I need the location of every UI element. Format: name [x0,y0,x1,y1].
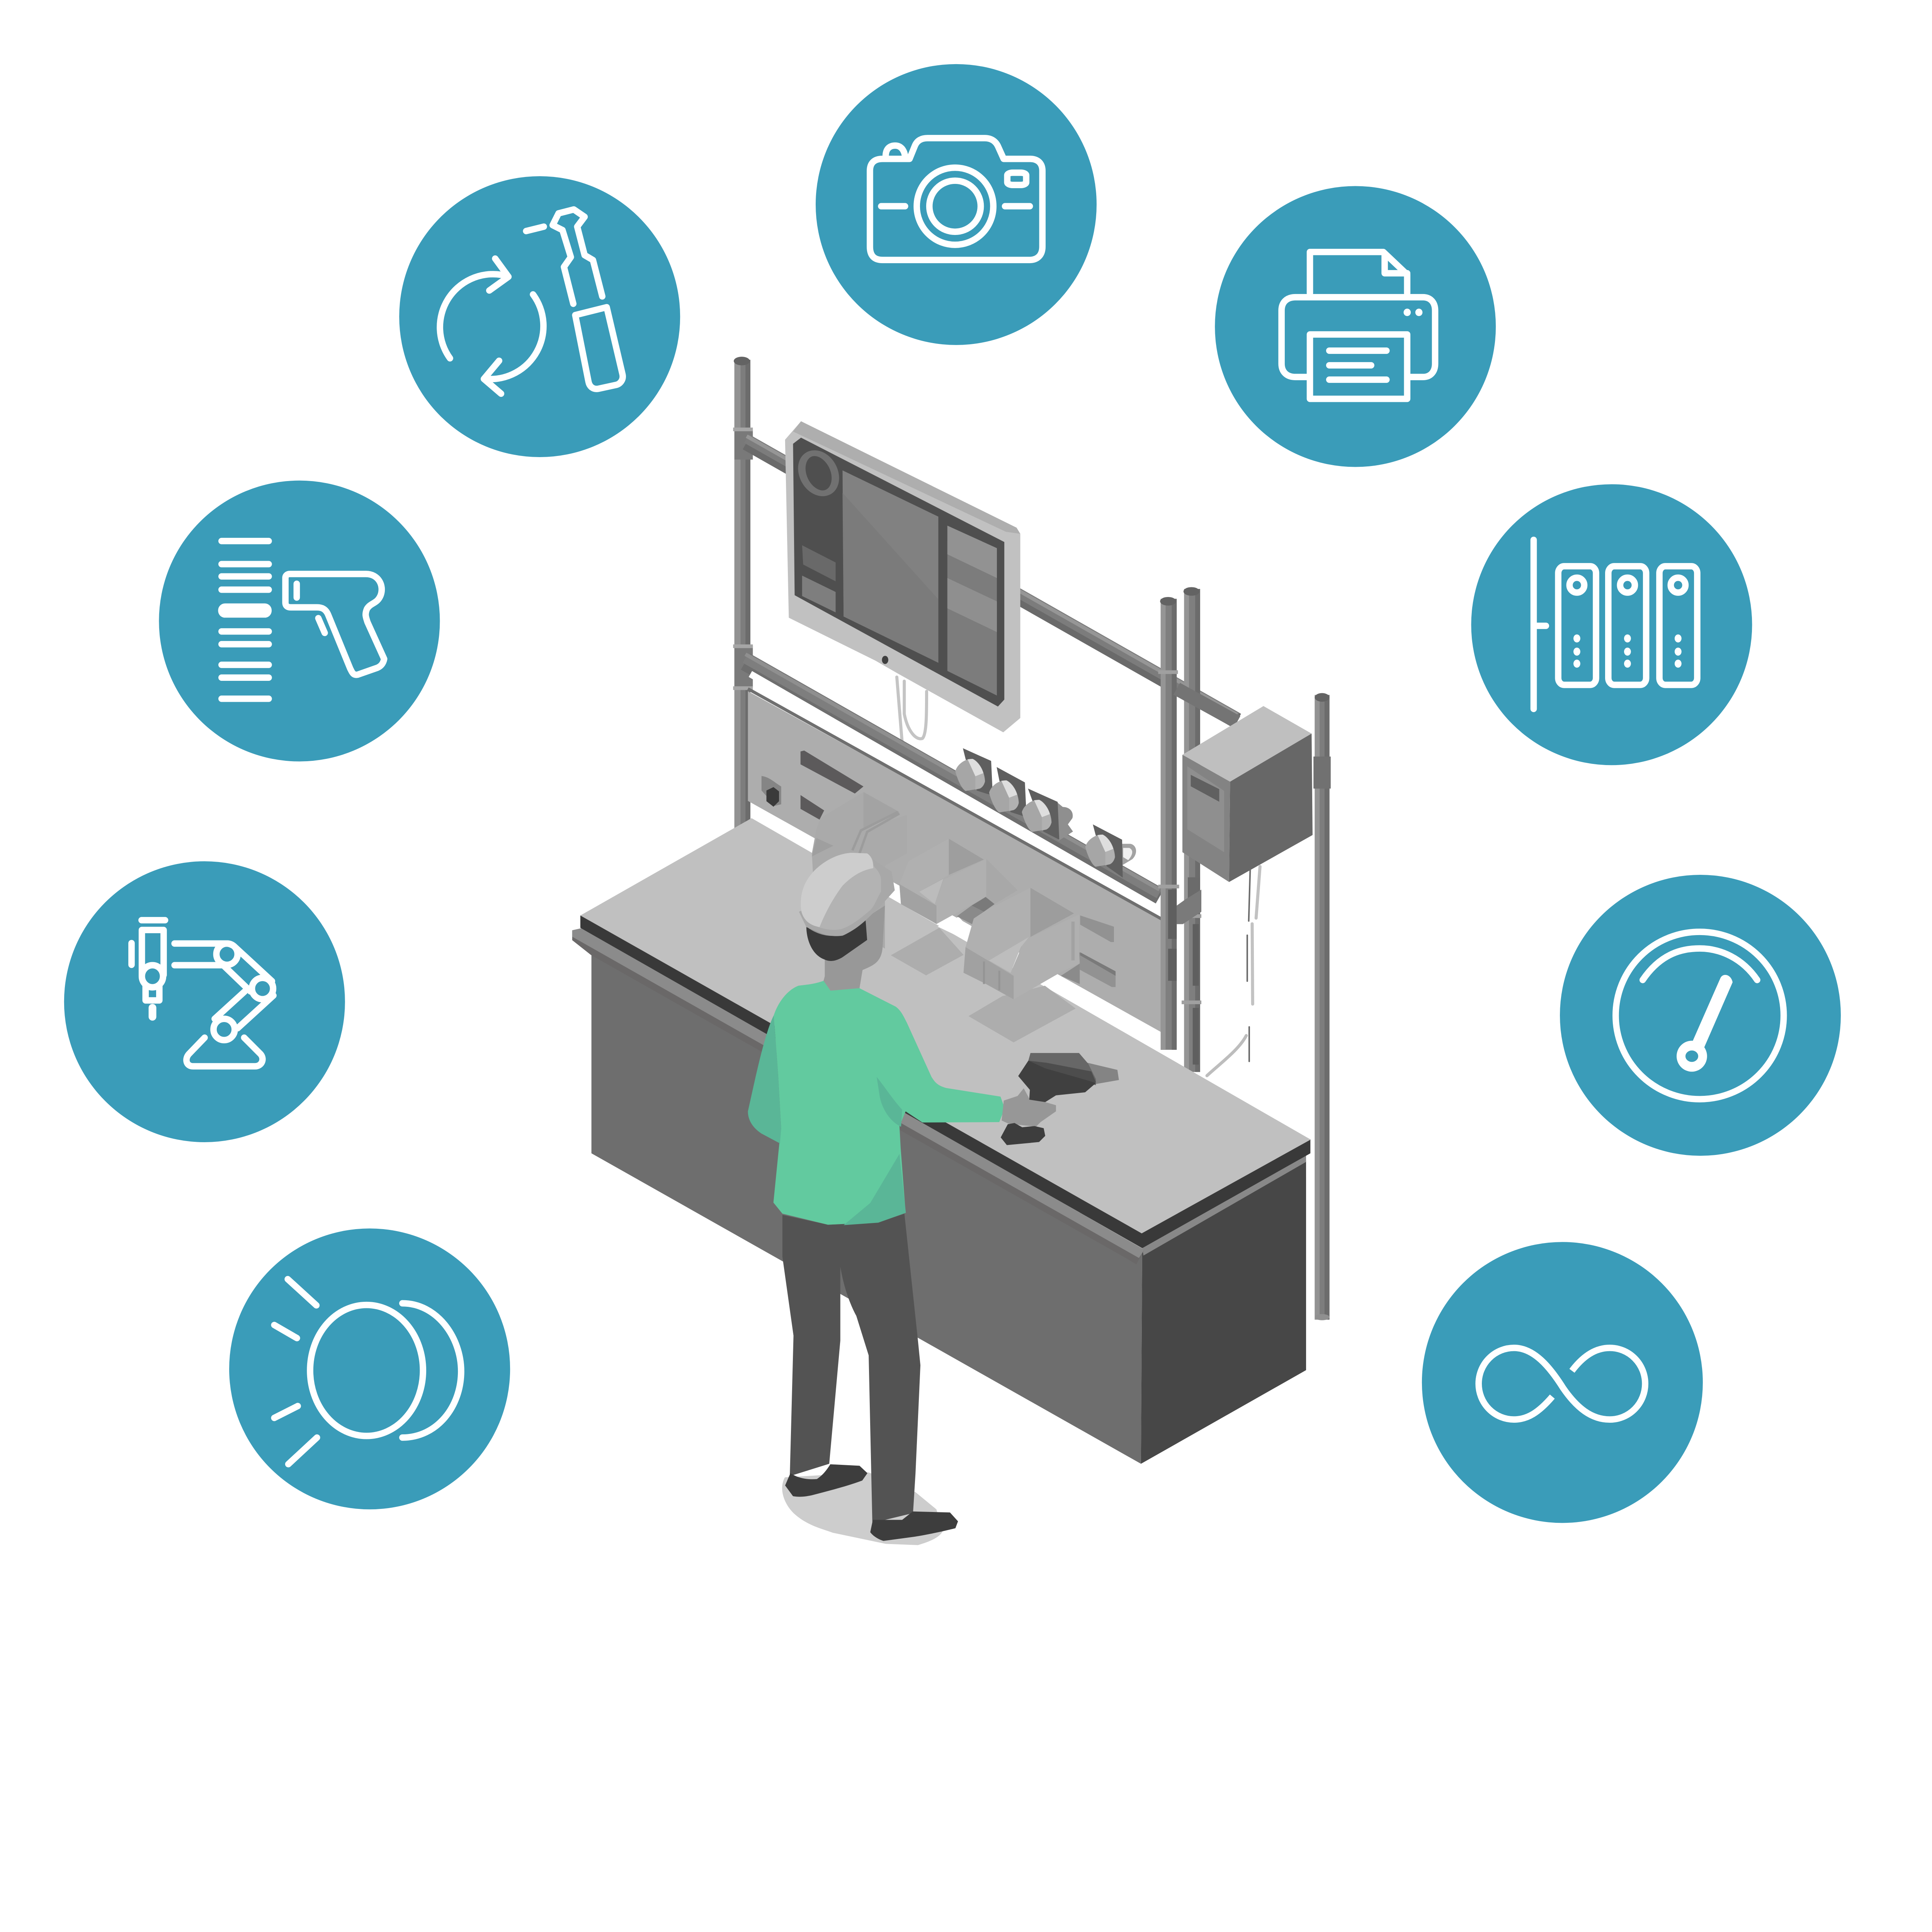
icon: server rack [1471,484,1752,765]
pipe T joint [1177,889,1201,924]
socket cable [777,834,801,854]
socket [767,787,779,807]
box door [1187,766,1224,852]
front upright pole [1158,597,1179,1050]
monitor [785,421,1020,732]
lower cross bar [745,654,1160,897]
floor shadow [782,1473,942,1545]
table top [580,818,1311,1236]
box top [1182,706,1311,782]
left small panels [802,545,836,581]
hair [806,920,867,961]
monitor top edge [793,421,1020,534]
glove dark blob [1001,1123,1045,1145]
monitor cable [897,677,927,743]
hanging wires [1207,867,1260,1076]
icon: robot arm [64,861,345,1142]
slot upper [801,750,864,794]
left sleeve [748,1015,781,1143]
storage bin 3 [964,888,1079,999]
knob 4 [1085,824,1123,878]
shirt [774,981,1005,1225]
left pole [733,357,753,828]
cap brim shade [799,859,895,936]
cap highlight [801,853,873,927]
knobs on rail [955,748,1136,878]
scanner band [1028,1061,1096,1087]
right inner pole [1182,587,1201,1072]
side panel [947,526,997,696]
icon: speed gauge [1560,875,1841,1156]
socket plate [762,776,781,806]
table front face [592,950,1142,1464]
bar overlap at right pole [1177,689,1237,722]
icon: lens light [229,1228,510,1509]
shoe front [870,1512,958,1541]
knob 1 [955,748,993,796]
knob 4 tail [1122,844,1136,865]
scanner nose [1085,1062,1119,1084]
cap [801,853,881,930]
knob 3 [1022,789,1059,840]
icon: tool with rotation arrows [399,176,680,457]
worker [748,853,1119,1545]
hand [1002,1088,1056,1127]
icon: infinity loop [1422,1242,1703,1523]
box label [1191,775,1219,802]
electrical box [1182,706,1313,882]
main display [842,470,938,663]
panel right slots [1061,915,1116,987]
bin shadows [891,928,1076,1043]
storage bin 1 [812,792,907,949]
box right face [1229,733,1313,882]
icon: barcode scanner [159,481,440,762]
shirt hem shade [844,1154,906,1225]
knob 3 tail [1057,802,1073,841]
table black edge [580,915,1310,1248]
white gap behind bins [938,917,973,941]
monitor screen [793,438,1004,707]
scanner body [1018,1061,1096,1102]
table end highlight [1142,1153,1306,1255]
knob 2 [989,767,1027,817]
table front rail [572,928,1144,1264]
far right pole [1313,693,1331,1320]
shoe back [785,1464,867,1497]
white gap under bar [750,674,1157,908]
icon: camera [816,64,1097,345]
monitor bezel [785,421,1020,732]
table end face [1141,1161,1306,1464]
back panel [748,689,1162,1032]
armpit shade [877,1077,902,1127]
upper cross bar [747,436,1237,721]
camera dot [882,656,888,664]
icon: printer [1215,186,1496,467]
trousers [782,1214,920,1523]
box left face [1182,755,1230,882]
panel slots and socket [762,750,864,854]
scanner top [1028,1053,1096,1085]
scanner and hand [1001,1053,1119,1145]
neck and head [799,853,895,991]
workstation illustration [572,357,1331,1545]
slot lower [801,795,824,820]
storage bin 2 [900,838,1018,925]
monitor logo ring [797,451,840,496]
